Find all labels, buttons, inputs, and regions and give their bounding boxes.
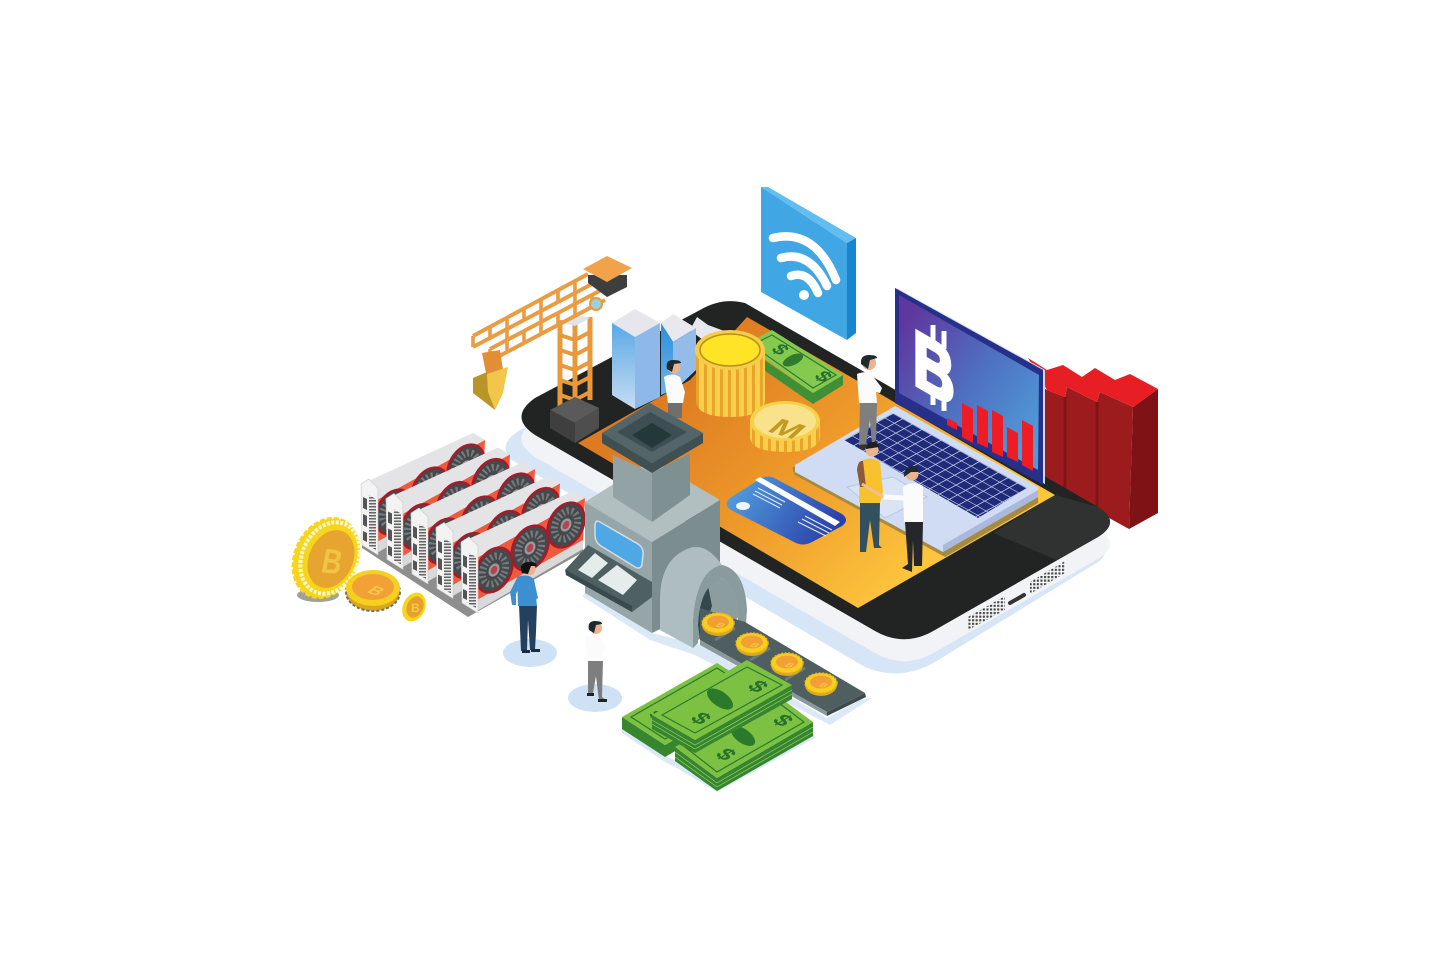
speaker grille right [1030,561,1065,594]
paper money on phone: $ [809,368,837,385]
graphics card mining rig [361,433,594,617]
figure [510,562,540,653]
phone dark bezel [522,301,1110,639]
machine neck [613,453,690,522]
small bitcoin coin [398,589,430,625]
speaker grille left [968,596,1005,630]
conveyor coin 3: B [782,661,797,669]
man in blue [503,562,557,667]
platform [568,684,622,712]
machine shadow [582,593,872,725]
M coin [750,401,820,452]
phone white body [522,323,1110,661]
M coin: M [762,414,813,444]
crane top cab [583,256,632,310]
red bar chart behind phone [1028,358,1158,529]
coins on conveyor [702,613,837,696]
banknote stack back: $ [645,708,666,721]
platform [503,639,557,667]
credit card [726,476,846,544]
machine hopper [602,403,703,473]
laptop base [792,410,1038,557]
crane [473,256,632,443]
cards [361,433,494,555]
crane base [550,397,599,443]
woman in yellow [857,442,883,552]
conveyor coin 1: B [713,621,728,629]
keyboard [844,413,1027,518]
banknote shadow [622,728,815,792]
medium bitcoin coin [346,570,400,611]
large bitcoin coin: B [318,542,346,582]
conveyor coin 4: B [816,681,831,689]
crane tower [560,314,590,414]
person by towers [664,360,685,418]
banknote stack front [675,691,813,791]
banknote stack top: $ [742,676,775,696]
person standing at laptop [857,355,882,450]
machine body [585,460,720,633]
phone [506,301,1110,673]
banknote stack back [622,663,760,757]
phone blue shadow [506,340,1105,673]
crane hook [473,350,508,410]
laptop bar chart [947,403,1033,471]
conveyor belt [700,608,866,716]
bezel highlight [993,495,1110,560]
laptop screen frame [895,288,1045,484]
banknote stack front: $ [710,744,743,764]
machine tunnel arch [660,547,747,648]
touchpad [847,477,927,518]
large bitcoin coin [281,508,371,608]
conveyor coin 2: B [747,641,762,649]
rig base [362,520,583,617]
laptop display [899,295,1039,470]
home button [1010,595,1024,603]
man in white by conveyor [568,621,622,712]
small bitcoin coin: B [411,601,420,615]
stacks of green banknotes [622,660,815,792]
paper money on phone [745,330,843,404]
phone screen [578,317,1055,608]
gold coin stack [695,330,765,417]
laptop [792,288,1045,557]
crane boom [473,274,605,361]
bitcoin printing machine [565,403,872,725]
machine control panel [565,545,652,612]
wifi panel [761,187,856,340]
man in white shirt shaking hands [884,466,923,572]
banknote stack top [652,660,792,753]
banknote stack top: $ [685,708,718,728]
paper money on phone: $ [766,341,794,358]
blue towers [612,309,727,409]
banknote stack front: $ [767,710,800,730]
machine blue screen [595,521,643,568]
figure [585,621,607,702]
bitcoin symbol: B [913,313,955,424]
medium bitcoin coin: B [363,584,389,598]
